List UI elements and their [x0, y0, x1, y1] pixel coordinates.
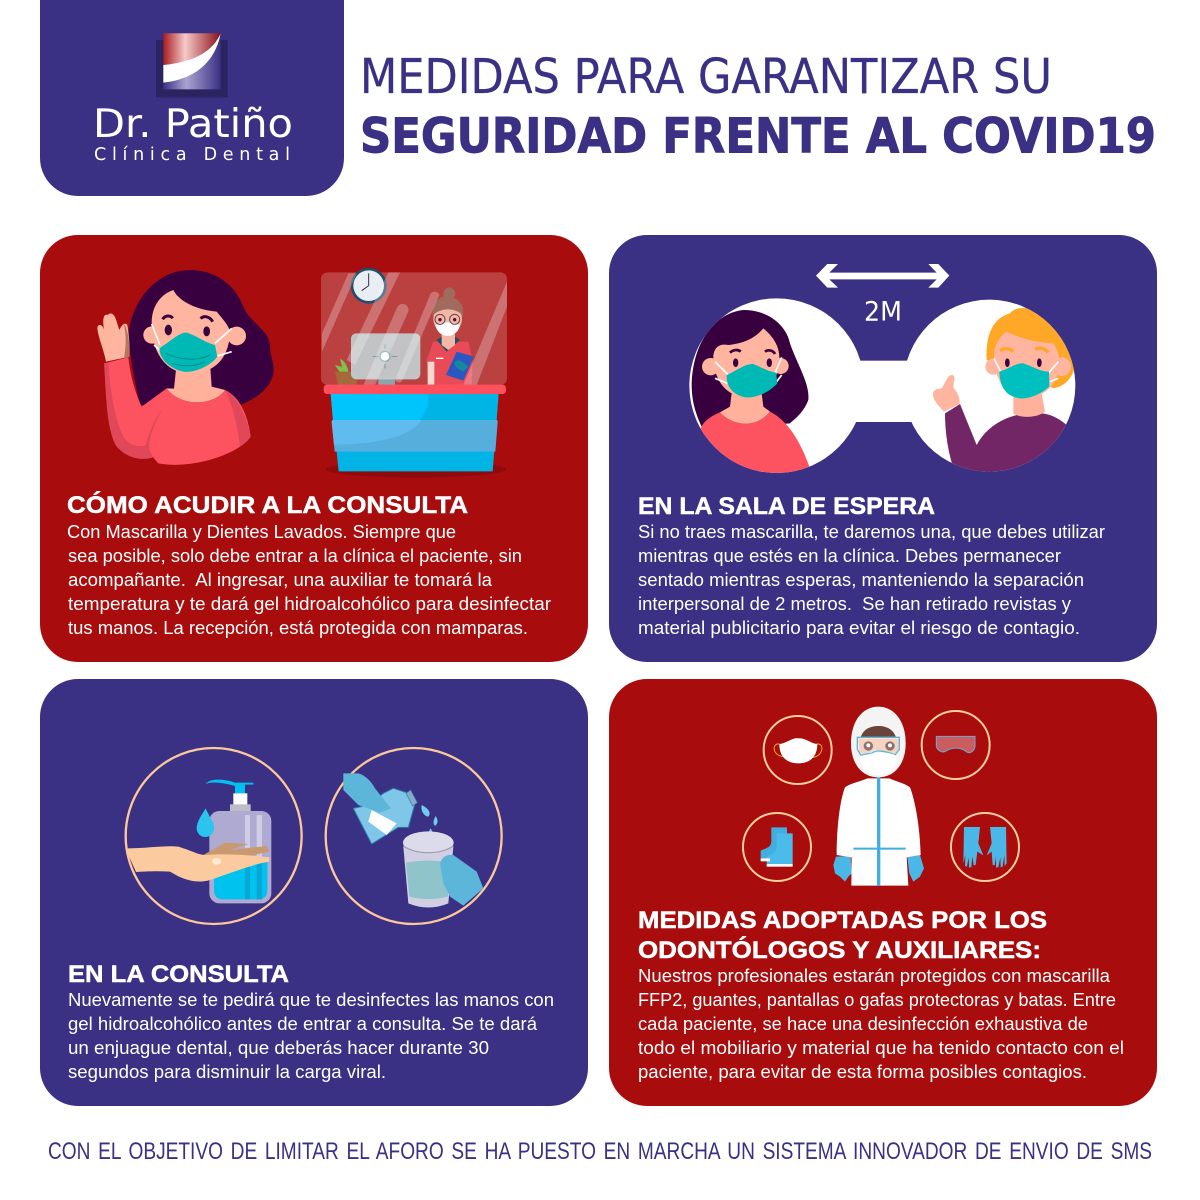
- nurse: [427, 287, 474, 385]
- icon: boots: [743, 813, 811, 881]
- body text: un enjuague dental, que deberás hacer durante 30: [68, 1037, 489, 1058]
- bottle: [353, 788, 415, 844]
- header logo panel: [40, 0, 344, 196]
- body text: mientras que estés en la clínica. Debes permanecer: [638, 545, 1061, 566]
- logo name: Dr. Patiño: [93, 102, 293, 147]
- illustration: hand sanitiser: [126, 748, 302, 924]
- panel: como acudir a la consulta: [40, 235, 588, 662]
- body text: paciente, para evitar de esta forma posibles contagios.: [638, 1061, 1087, 1082]
- heading: EN LA SALA DE ESPERA: [638, 493, 935, 520]
- heading: ODONTÓLOGOS Y AUXILIARES:: [638, 936, 1041, 964]
- body text: Con Mascarilla y Dientes Lavados. Siempre que: [67, 521, 456, 542]
- plant: [335, 358, 357, 385]
- icon: gloves: [951, 813, 1019, 881]
- panel: en la consulta: [40, 679, 588, 1106]
- illustration: mouth rinse poured into glass: [326, 748, 502, 924]
- panel: medidas adoptadas: [609, 679, 1157, 1106]
- panel: en la sala de espera: [609, 235, 1157, 662]
- illustration: two people two metres apart: [689, 264, 1075, 477]
- hand: [203, 843, 269, 857]
- body text: Nuestros profesionales estarán protegidos con mascarilla: [638, 965, 1111, 986]
- body text: [67, 521, 551, 638]
- body text: sea posible, solo debe entrar a la clínica el paciente, sin: [68, 545, 522, 566]
- body text: [638, 521, 1105, 638]
- glass: [403, 847, 453, 907]
- illustration: woman waving with mask: [97, 270, 274, 465]
- screen reflections: [322, 272, 507, 385]
- arrow: two metre distance: [816, 264, 949, 288]
- heading: EN LA CONSULTA: [68, 961, 289, 988]
- icon: clinic logo mark: [156, 33, 228, 97]
- body text: acompañante. Al ingresar, una auxiliar te tomará la: [68, 569, 493, 590]
- body text: FFP2, guantes, pantallas o gafas protectoras y batas. Entre: [638, 989, 1116, 1010]
- icon: goggles: [922, 711, 990, 779]
- body text: material publicitario para evitar el riesgo de contagio.: [638, 617, 1080, 638]
- heading: MEDIDAS ADOPTADAS POR LOS: [638, 907, 1047, 934]
- person right: [933, 308, 1075, 477]
- heading: [638, 907, 1047, 964]
- distance label: 2M: [864, 297, 902, 328]
- monitor: [351, 333, 420, 385]
- body text: interpersonal de 2 metros. Se han retirado revistas y: [638, 593, 1072, 614]
- logo subtitle: Clínica Dental: [94, 145, 290, 165]
- counter: [324, 385, 506, 471]
- illustration: protective equipment: [743, 707, 1019, 886]
- person left: [692, 310, 809, 477]
- figure in protective suit: [833, 707, 924, 886]
- body text: gel hidroalcohólico antes de entrar a consulta. Se te dará: [68, 1013, 538, 1034]
- body text: segundos para disminuir la carga viral.: [68, 1061, 386, 1082]
- body text: Nuevamente se te pedirá que te desinfectes las manos con: [68, 989, 554, 1010]
- icon: mask: [764, 716, 832, 784]
- body text: [638, 965, 1124, 1082]
- heading: CÓMO ACUDIR A LA CONSULTA: [67, 491, 468, 519]
- body text: temperatura y te dará gel hidroalcohólico para desinfectar: [68, 593, 551, 614]
- body text: tus manos. La recepción, está protegida con mamparas.: [68, 617, 528, 638]
- title: MEDIDAS PARA GARANTIZAR SU: [360, 49, 1052, 105]
- glove: [440, 855, 483, 906]
- body text: sentado mientras esperas, manteniendo la separación: [638, 569, 1084, 590]
- body text: Si no traes mascarilla, te daremos una, que debes utilizar: [638, 521, 1105, 542]
- illustration: reception with protective screen: [321, 268, 507, 478]
- title: [360, 49, 1156, 165]
- body text: cada paciente, se hace una desinfección exhaustiva de: [638, 1013, 1088, 1034]
- body text: todo el mobiliario y material que ha tenido contacto con el: [638, 1037, 1124, 1058]
- body text: [68, 989, 554, 1082]
